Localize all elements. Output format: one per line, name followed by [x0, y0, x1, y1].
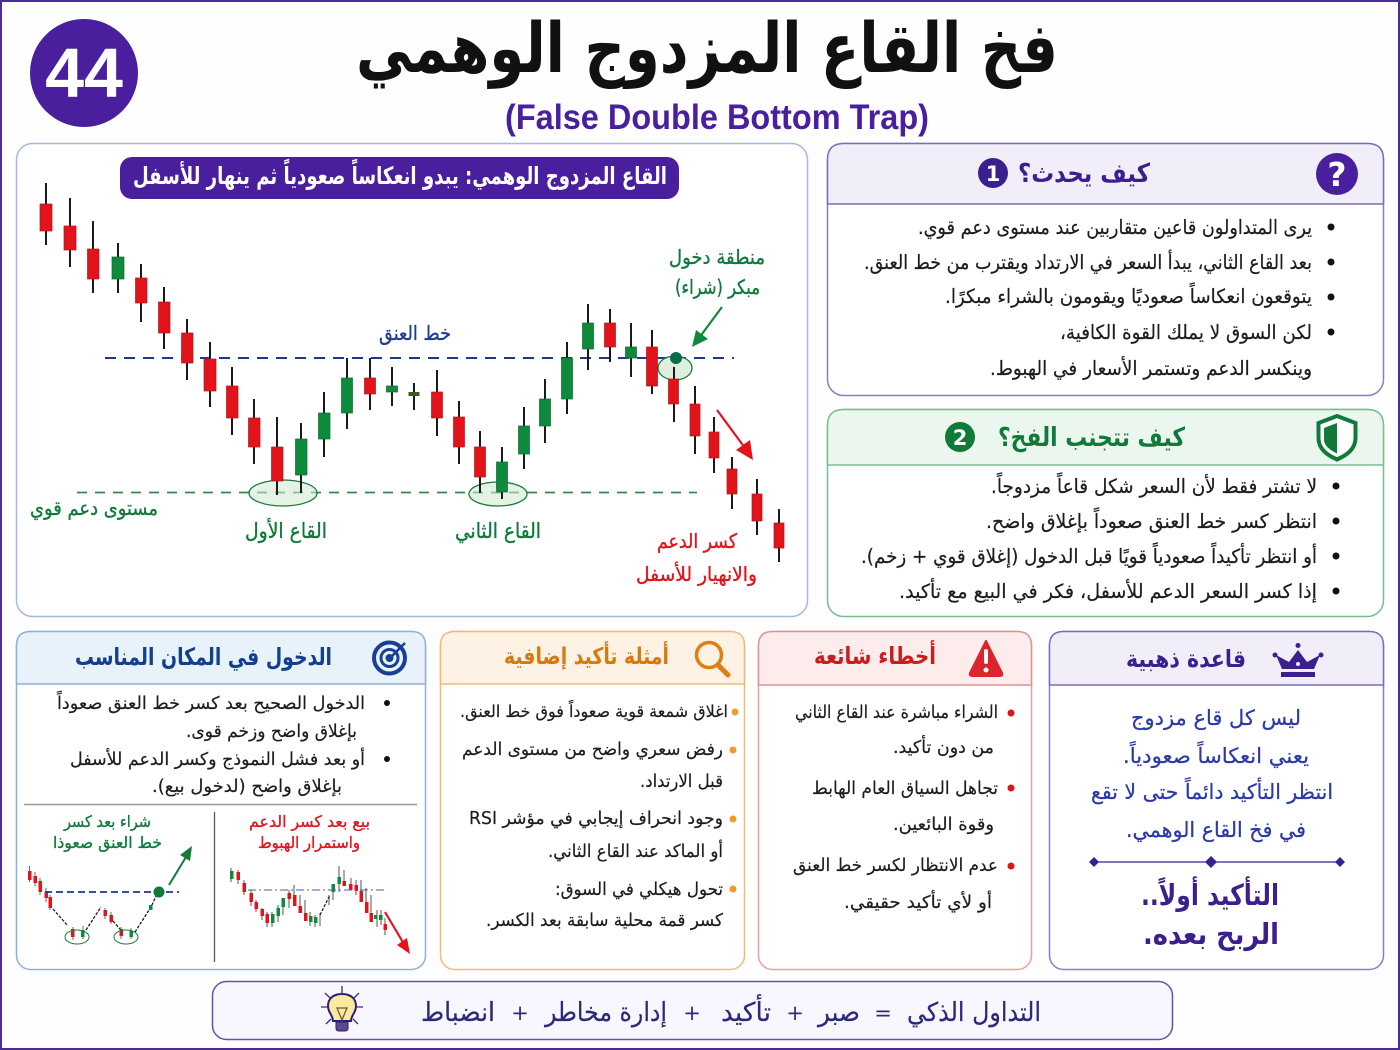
- panel: how to avoid the trap: [828, 410, 1384, 616]
- panel: chart: [16, 144, 808, 616]
- divider with diamonds: [1089, 856, 1345, 868]
- text: how to avoid: أو انتظر تأكيداً صعودياً قويًا قبل الدخول (إغلاق قوي + زخم).: [861, 542, 1317, 569]
- bullets: [1328, 224, 1334, 336]
- panel: common mistakes: [758, 632, 1032, 970]
- text: how it happens: [864, 216, 1312, 380]
- text: mistakes: وقوة البائعين.: [893, 815, 994, 835]
- bullets: [1008, 710, 1014, 870]
- formula: =: [874, 1001, 892, 1025]
- number 1: [978, 158, 1008, 188]
- label: buy scenario: خط العنق صعوذا: [53, 833, 162, 853]
- golden rule text: انتظر التأكيد دائماً حتى لا تقع: [1091, 776, 1333, 804]
- badge: number 44: [30, 19, 138, 127]
- entry point dot: [670, 352, 682, 364]
- text: how to avoid: لا تشتر فقط لأن السعر شكل قاعاً مزدوجاً.: [991, 472, 1317, 498]
- text: mistakes: أو لأي تأكيد حقيقي.: [844, 890, 992, 913]
- text: how to avoid: [861, 472, 1317, 604]
- text: how it happens: بعد القاع الثاني، يبدأ السعر في الارتداد ويقترب من خط العنق.: [864, 250, 1312, 274]
- arrow: breakdown: [717, 410, 753, 460]
- label: sell scenario: واستمرار الهبوط: [258, 833, 360, 853]
- bottom formula bar: [212, 982, 1172, 1040]
- text: how it happens: وينكسر الدعم وتستمر الأسعار في الهبوط.: [990, 356, 1312, 380]
- mini chart: buy scenario: [28, 846, 192, 944]
- text: examples: تحول هيكلي في السوق:: [555, 880, 723, 900]
- second bottom highlight: [469, 482, 527, 506]
- golden rule conclusion: [1141, 876, 1279, 951]
- text: examples: أو الماكد عند القاع الثاني.: [548, 839, 723, 862]
- subtitle: (False Double Bottom Trap): [505, 98, 929, 137]
- panel: golden rule: [1050, 632, 1384, 970]
- golden rule text: يعني انعكاساً صعودياً.: [1123, 740, 1309, 768]
- formula: +: [786, 1001, 804, 1025]
- text: correct entry: أو بعد فشل النموذج وكسر الدعم للأسفل: [70, 747, 365, 770]
- text: how to avoid: انتظر كسر خط العنق صعوداً بإغلاق واضح.: [986, 507, 1317, 534]
- number 2: [945, 422, 975, 452]
- bullets: [1332, 482, 1340, 594]
- label: support break: [636, 529, 757, 586]
- icon: warning: [970, 641, 1002, 676]
- formula: تأكيد: [721, 993, 771, 1028]
- number 1: 1: [986, 162, 1000, 186]
- icon: question mark: [1316, 153, 1358, 195]
- badge: number 44: 44: [45, 34, 123, 112]
- text: mistakes: من دون تأكيد.: [893, 735, 994, 758]
- candlesticks: [40, 183, 784, 562]
- text: how it happens: يتوقعون انعكاساً صعوديًا ويقومون بالشراء مبكرًا.: [945, 282, 1312, 308]
- golden rule text: [1091, 706, 1333, 842]
- golden rule conclusion: التأكيد أولاً..: [1141, 876, 1279, 912]
- text: mistakes: [793, 703, 998, 913]
- mini chart: sell scenario: [230, 866, 410, 954]
- icon: light bulb: [321, 986, 363, 1031]
- icon: question mark: ?: [1327, 155, 1347, 194]
- text: examples: قبل الارتداد.: [640, 772, 723, 792]
- text: correct entry: الدخول الصحيح بعد كسر خط العنق صعوداً: [56, 690, 365, 714]
- panel: correct entry: [16, 632, 426, 970]
- first bottom highlight: [249, 480, 317, 506]
- formula: انضباط: [421, 998, 495, 1028]
- entry highlight: [658, 356, 692, 380]
- bullets: [384, 700, 390, 762]
- label: neckline: خط العنق: [379, 321, 451, 345]
- formula: التداول الذكي: [907, 998, 1041, 1028]
- heading: كيف يحدث؟: [1018, 159, 1151, 189]
- text: correct entry: [56, 690, 365, 797]
- label: buy scenario: شراء بعد كسر: [63, 812, 151, 832]
- icon: crown: [1272, 643, 1324, 677]
- text: examples: [460, 699, 728, 931]
- label: strong support: مستوى دعم قوي: [30, 496, 158, 521]
- text: how it happens: يرى المتداولون قاعين متقاربين عند مستوى دعم قوي.: [918, 216, 1312, 239]
- label: early entry zone: مبكر (شراء): [675, 275, 760, 299]
- icon: magnifier: [696, 642, 728, 675]
- formula: +: [683, 1001, 701, 1025]
- chart banner: القاع المزدوج الوهمي: يبدو انعكاساً صعودياً ثم ينهار للأسفل: [133, 159, 667, 190]
- text: correct entry: بإغلاق واضح (لدخول بيع).: [152, 777, 342, 797]
- panel: how it happens: [828, 144, 1384, 396]
- heading: أمثلة تأكيد إضافية: [504, 640, 669, 670]
- label: first bottom: القاع الأول: [245, 518, 327, 543]
- text: how it happens: لكن السوق لا يملك القوة الكافية،: [1060, 321, 1312, 344]
- text: examples: وجود انحراف إيجابي في مؤشر RSI: [469, 809, 723, 829]
- golden rule text: في فخ القاع الوهمي.: [1126, 818, 1306, 842]
- text: mistakes: تجاهل السياق العام الهابط: [812, 779, 998, 799]
- label: sell scenario: [249, 812, 370, 853]
- text: examples: كسر قمة محلية سابقة بعد الكسر.: [486, 911, 724, 931]
- icon: shield: [1318, 416, 1356, 460]
- label: early entry zone: [669, 245, 765, 299]
- chart banner: [120, 157, 679, 199]
- label: buy scenario: [53, 812, 162, 853]
- golden rule conclusion: الربح بعده.: [1143, 917, 1279, 951]
- label: support break: والانهيار للأسفل: [636, 562, 757, 586]
- formula: [421, 993, 1041, 1028]
- neckline: [105, 357, 734, 359]
- bullets: [730, 708, 738, 892]
- number 2: 2: [953, 426, 967, 450]
- heading: الدخول في المكان المناسب: [75, 643, 332, 671]
- heading: قاعدة ذهبية: [1126, 645, 1246, 673]
- text: examples: اغلاق شمعة قوية صعوداً فوق خط العنق.: [460, 699, 728, 722]
- text: correct entry: بإغلاق واضح وزخم قوى.: [186, 722, 357, 742]
- heading: أخطاء شائعة: [814, 640, 936, 670]
- text: examples: رفض سعري واضح من مستوى الدعم: [462, 740, 723, 760]
- heading: كيف تتجنب الفخ؟: [998, 423, 1186, 453]
- arrow: entry: [692, 307, 722, 347]
- label: sell scenario: بيع بعد كسر الدعم: [249, 812, 370, 832]
- label: support break: كسر الدعم: [657, 529, 737, 553]
- support line: [77, 492, 697, 494]
- panel: additional confirmation examples: [440, 632, 744, 970]
- formula: إدارة مخاطر: [543, 998, 667, 1028]
- label: second bottom: القاع الثاني: [455, 519, 541, 543]
- label: early entry zone: منطقة دخول: [669, 245, 765, 269]
- title: فخ القاع المزدوج الوهمي: [356, 9, 1058, 89]
- text: how to avoid: إذا كسر السعر الدعم للأسفل، فكر في البيع مع تأكيد.: [899, 578, 1317, 604]
- formula: صبر: [816, 998, 860, 1028]
- golden rule text: ليس كل قاع مزدوج: [1131, 706, 1301, 731]
- text: mistakes: عدم الانتظار لكسر خط العنق: [793, 856, 998, 876]
- text: mistakes: الشراء مباشرة عند القاع الثاني: [795, 703, 998, 723]
- formula: +: [511, 1001, 529, 1025]
- icon: target: [374, 642, 405, 674]
